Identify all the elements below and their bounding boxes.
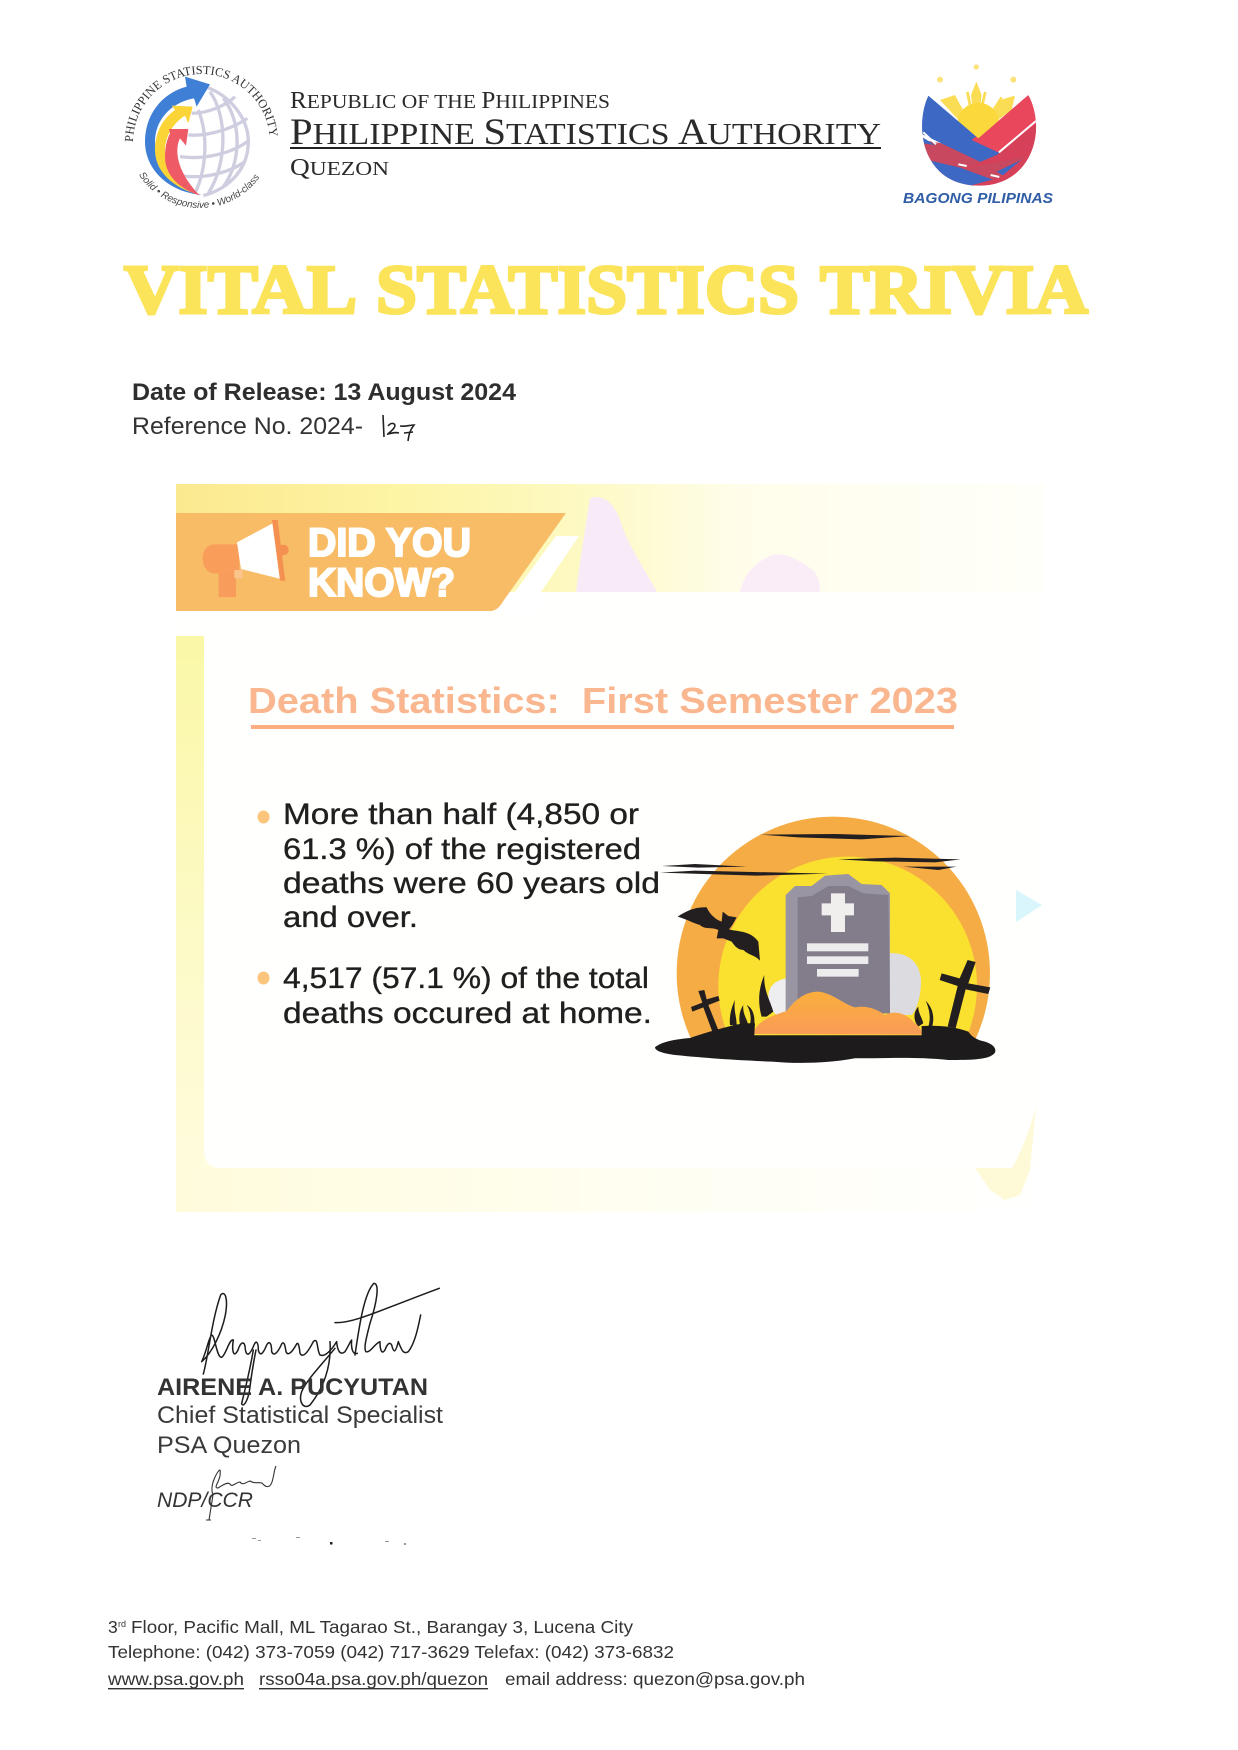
bullet two bbox=[258, 962, 652, 1030]
bullet two: deaths occured at home. bbox=[283, 997, 652, 1030]
pale right blob bbox=[975, 1107, 1036, 1200]
letterhead rule bbox=[290, 147, 881, 149]
tombstone bbox=[786, 874, 890, 1013]
bullet one: More than half (4,850 or bbox=[283, 798, 639, 831]
white stripe bbox=[500, 536, 579, 612]
line: Republic of the Philippines: REPUBLIC OF THE PHILIPPINES bbox=[290, 88, 610, 114]
signatory name: AIRENE A. PUCYUTAN bbox=[157, 1374, 428, 1401]
bat bbox=[678, 907, 760, 961]
signatory block bbox=[157, 1374, 443, 1459]
panel left bar bbox=[176, 636, 204, 1212]
reference number: Reference No. 2024- bbox=[132, 413, 363, 440]
signatory office: PSA Quezon bbox=[157, 1432, 301, 1459]
initials text: NDP/CCR bbox=[157, 1489, 253, 1512]
bullet one: deaths were 60 years old bbox=[283, 867, 660, 900]
title: VITAL bbox=[124, 252, 357, 329]
bullet two: 4,517 (57.1 %) of the total bbox=[283, 962, 649, 995]
logo: Bagong Pilipinas bbox=[903, 64, 1053, 207]
footer contact bbox=[107, 1617, 805, 1689]
website line: www.psa.gov.ph bbox=[107, 1669, 244, 1689]
address line: 3 bbox=[108, 1617, 118, 1637]
initials bbox=[157, 1466, 276, 1520]
logo: Philippine Statistics Authority seal bbox=[124, 66, 278, 208]
tomb lines bbox=[807, 943, 868, 951]
title bbox=[124, 252, 1088, 329]
signatory title: Chief Statistical Specialist bbox=[157, 1402, 443, 1429]
scan specks bbox=[252, 1537, 406, 1545]
panel top band bbox=[176, 484, 1044, 592]
heading: Death Statistics: First Semester 2023 bbox=[248, 680, 958, 721]
grass and crosses bbox=[691, 960, 990, 1032]
title: TRIVIA bbox=[820, 252, 1088, 329]
banner text bbox=[308, 521, 471, 605]
logo caption: BAGONG PILIPINAS bbox=[903, 190, 1053, 207]
bullet one bbox=[258, 798, 660, 934]
website line: rsso04a.psa.gov.ph/quezon bbox=[259, 1669, 488, 1689]
sun yellow bbox=[718, 856, 977, 1036]
logo ring text bottom: Solid • Responsive • World-class bbox=[140, 172, 259, 208]
back stones bbox=[888, 953, 921, 1015]
line: Quezon: QUEZON bbox=[290, 155, 389, 181]
heading underline bbox=[251, 725, 954, 729]
website line bbox=[107, 1669, 805, 1689]
logo ring text top: PHILIPPINE STATISTICS AUTHORITY bbox=[124, 66, 278, 142]
title: STATISTICS bbox=[376, 252, 799, 329]
ground bbox=[655, 1023, 995, 1063]
panel bottom band bbox=[176, 1168, 1044, 1212]
icon: megaphone bbox=[203, 520, 289, 597]
inner white corner bbox=[204, 1150, 222, 1168]
address line: Floor, Pacific Mall, ML Tagarao St., Barangay 3, Lucena City bbox=[131, 1617, 633, 1637]
panel: did you know bbox=[176, 484, 1044, 1212]
logo globe and arrows bbox=[145, 77, 249, 196]
initials scribble bbox=[206, 1466, 276, 1520]
signature bbox=[202, 1283, 439, 1406]
date of release: Date of Release: 13 August 2024 bbox=[132, 379, 517, 406]
bullet one: 61.3 %) of the registered bbox=[283, 833, 641, 866]
line: Philippine Statistics Authority: PHILIPPINE STATISTICS AUTHORITY bbox=[290, 112, 881, 153]
bullet one: and over. bbox=[283, 901, 418, 934]
pale cyan triangle bbox=[1016, 890, 1042, 922]
banner text: KNOW? bbox=[308, 561, 455, 605]
banner bbox=[176, 513, 566, 611]
clouds bbox=[660, 834, 961, 876]
dirt mound bbox=[754, 992, 922, 1035]
tomb cross bbox=[822, 893, 854, 932]
pink map shape tall bbox=[576, 497, 657, 592]
pink map shape short bbox=[740, 554, 820, 592]
panel white body bbox=[176, 592, 1044, 1212]
handwritten reference digits bbox=[383, 415, 414, 441]
address line: rd bbox=[118, 1619, 126, 1629]
release info bbox=[132, 379, 517, 441]
website line: email address: quezon@psa.gov.ph bbox=[505, 1669, 805, 1689]
sun orange bbox=[676, 816, 990, 1038]
letterhead text bbox=[290, 88, 881, 181]
emblem bbox=[922, 64, 1036, 186]
telephone line: Telephone: (042) 373-7059 (042) 717-3629 Telefax: (042) 373-6832 bbox=[108, 1642, 674, 1662]
banner text: DID YOU bbox=[308, 521, 471, 565]
illustration: graveyard bbox=[655, 816, 996, 1063]
